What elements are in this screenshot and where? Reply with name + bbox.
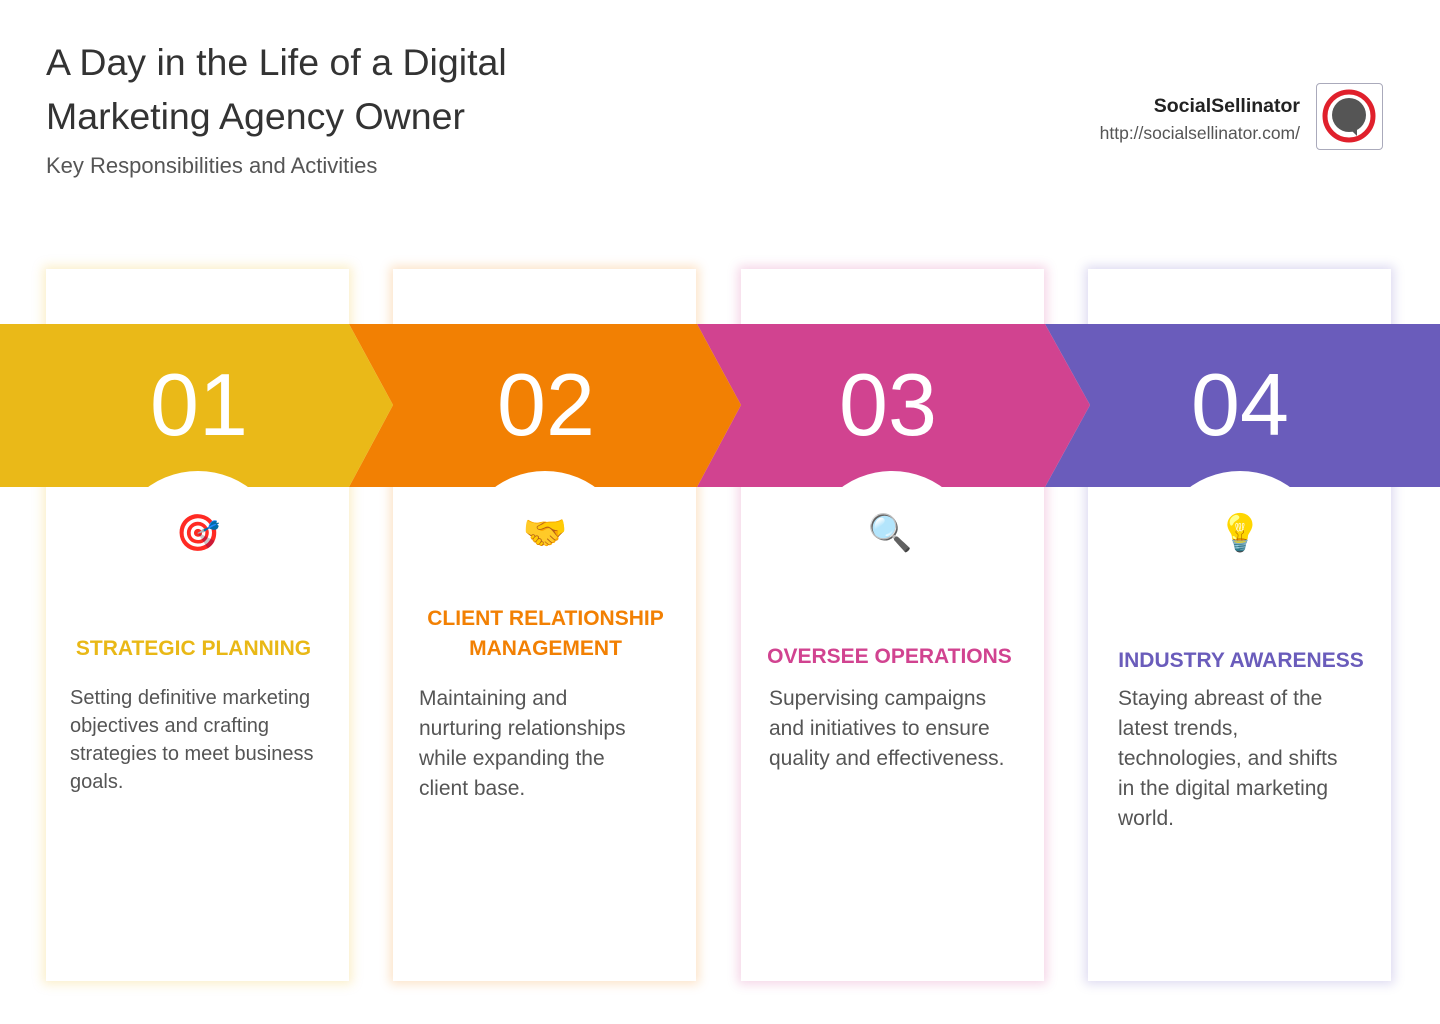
icon: magnifier: 🔍 (868, 512, 912, 554)
heading 2: CLIENT RELATIONSHIP (427, 607, 664, 630)
card 3 (741, 269, 1044, 981)
logo (1316, 83, 1383, 150)
arrow band: 04 (1191, 355, 1289, 454)
arrow band: 01 (150, 355, 248, 454)
text 4: Staying abreast of the latest trends, technologies, and shifts in the digital marketing world. (1118, 687, 1337, 830)
title (46, 41, 507, 137)
subtitle: Key Responsibilities and Activities (46, 153, 377, 178)
text 1: Setting definitive marketing objectives and crafting strategies to meet business goals. (70, 687, 313, 793)
icon: bulb: 💡 (1218, 512, 1262, 554)
brand block: SocialSellinator (1154, 95, 1300, 117)
card 2 (393, 269, 696, 981)
brand block (1100, 95, 1300, 143)
card 1 (46, 269, 349, 981)
arrow band: 03 (839, 355, 937, 454)
text 3: Supervising campaigns and initiatives to ensure quality and effectiveness. (769, 687, 1004, 770)
heading 2: MANAGEMENT (469, 637, 622, 660)
card 4 (1088, 269, 1391, 981)
heading 1: STRATEGIC PLANNING (76, 637, 311, 660)
arrow band: 02 (497, 355, 595, 454)
heading 3: OVERSEE OPERATIONS (767, 645, 1012, 668)
title: Marketing Agency Owner (46, 95, 465, 137)
icon: handshake: 🤝 (523, 512, 567, 554)
title: A Day in the Life of a Digital (46, 41, 507, 83)
brand block: http://socialsellinator.com/ (1100, 123, 1300, 143)
icon: target: 🎯 (176, 512, 220, 554)
heading 2 (427, 607, 664, 660)
text 2: Maintaining and nurturing relationships while expanding the client base. (419, 687, 626, 800)
heading 4: INDUSTRY AWARENESS (1118, 649, 1364, 672)
